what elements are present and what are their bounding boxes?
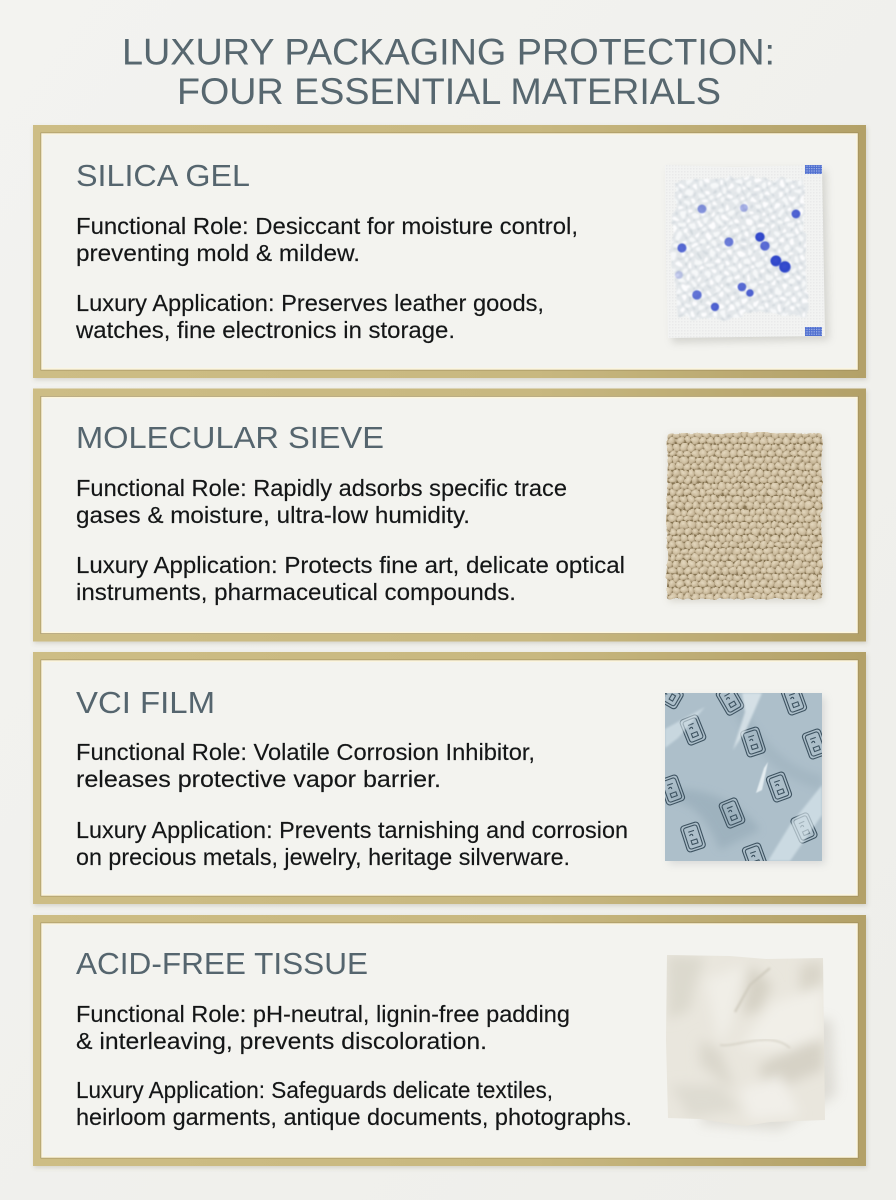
text: acid-free tissue luxury application: heirloom garments, antique documents, photographs. [76, 1104, 632, 1130]
text: vci film functional role: releases protective vapor barrier. [76, 766, 441, 792]
text: acid-free tissue functional role: & interleaving, prevents discoloration. [76, 1028, 487, 1054]
text: molecular sieve functional role [76, 475, 567, 528]
panel: acid-free tissue [37, 919, 862, 1162]
text: silica gel functional role: Functional Role: Desiccant for moisture control, [76, 213, 578, 239]
text: molecular sieve luxury application [76, 552, 625, 605]
image: acid-free tissue sheet [666, 955, 836, 1130]
panel: vci film [37, 656, 862, 900]
text: vci film functional role [76, 739, 535, 792]
title: LUXURY PACKAGING PROTECTION: [122, 32, 775, 72]
text: vci film luxury application: Luxury Application: Prevents tarnishing and corrosion [76, 817, 628, 843]
text: molecular sieve luxury application: Luxury Application: Protects fine art, delicate optical [76, 552, 625, 578]
text: silica gel functional role [76, 213, 578, 266]
title: FOUR ESSENTIAL MATERIALS [177, 71, 721, 112]
text: silica gel luxury application: watches, fine electronics in storage. [75, 317, 455, 343]
text: molecular sieve functional role: gases & moisture, ultra-low humidity. [76, 502, 470, 528]
image: vci film sheet [665, 693, 827, 866]
text: acid-free tissue luxury application: Luxury Application: Safeguards delicate textiles, [76, 1077, 553, 1103]
image: molecular sieve beads [667, 433, 823, 601]
heading: molecular sieve: MOLECULAR SIEVE [76, 420, 384, 455]
heading: acid-free tissue: ACID-FREE TISSUE [76, 946, 368, 981]
heading: vci film: VCI FILM [76, 685, 215, 720]
text: acid-free tissue functional role: Functional Role: pH-neutral, lignin-free padding [76, 1001, 570, 1027]
image: silica gel packet [665, 165, 829, 343]
text: acid-free tissue functional role [76, 1001, 570, 1054]
text: molecular sieve functional role: Functional Role: Rapidly adsorbs specific trace [76, 475, 567, 501]
text: vci film functional role: Functional Role: Volatile Corrosion Inhibitor, [76, 739, 535, 765]
text: vci film luxury application [76, 817, 628, 870]
text: silica gel functional role: preventing mold & mildew. [76, 240, 360, 266]
text: silica gel luxury application: Luxury Application: Preserves leather goods, [76, 290, 544, 316]
text: molecular sieve luxury application: instruments, pharmaceutical compounds. [76, 579, 516, 605]
title [122, 32, 775, 112]
heading: silica gel: SILICA GEL [76, 158, 250, 193]
text: vci film luxury application: on precious metals, jewelry, heritage silverware. [76, 844, 570, 870]
text: silica gel luxury application [75, 290, 544, 343]
panel: molecular sieve [37, 392, 862, 638]
panel: silica gel [37, 129, 862, 374]
text: acid-free tissue luxury application [76, 1077, 632, 1130]
